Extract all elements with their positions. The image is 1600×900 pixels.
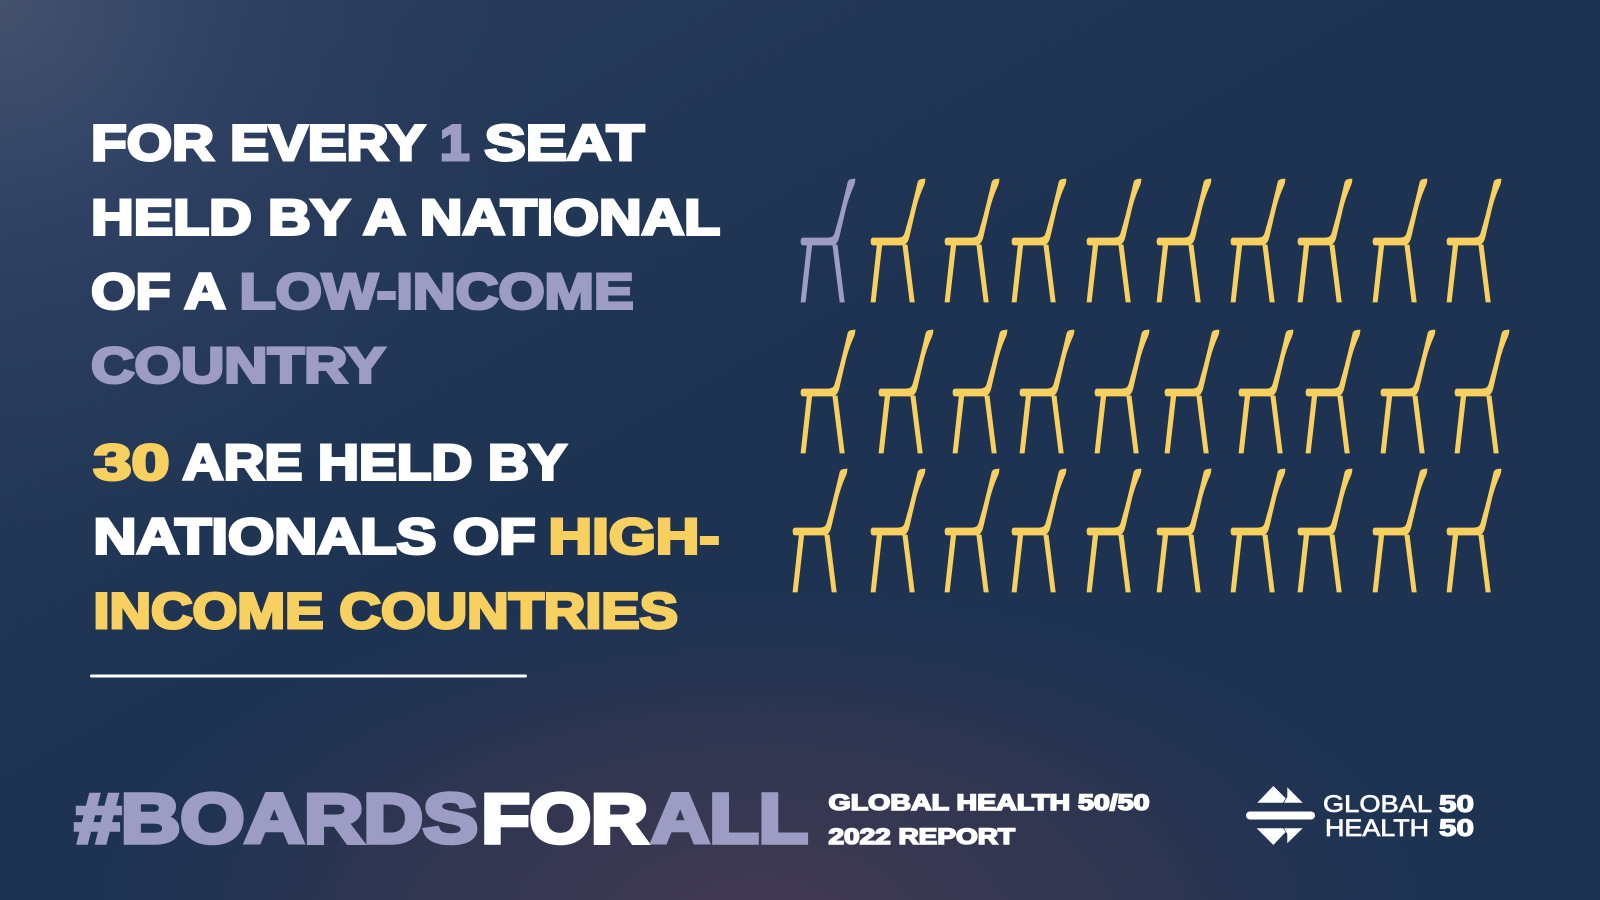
report label: GLOBAL HEALTH 50/50 (828, 790, 1150, 815)
divider line (90, 674, 527, 678)
headline: thirty seats held by high-income nationals: NATIONALS OF (94, 508, 536, 564)
headline: thirty seats held by high-income nationals: ARE HELD BY (183, 434, 567, 490)
chairs row 1: one purple, nine yellow (801, 179, 1501, 302)
headline: one seat held by low-income national: COUNTRY (91, 338, 385, 394)
logo wordmark: GLOBAL (1323, 791, 1432, 818)
headline: one seat held by low-income national: FOR EVERY (91, 115, 425, 171)
headline: thirty seats held by high-income nationals (94, 434, 720, 639)
hashtag: FOR (482, 780, 648, 858)
headline: one seat held by low-income national: OF A (91, 264, 226, 320)
headline: thirty seats held by high-income nationals: INCOME COUNTRIES (94, 583, 678, 639)
logo wordmark: HEALTH (1325, 815, 1429, 842)
hashtag: ALL (651, 780, 808, 858)
hashtag: #BOARDS (75, 780, 478, 858)
headline: one seat held by low-income national: 1 (440, 115, 470, 171)
report label: 2022 REPORT (828, 824, 1016, 849)
headline: one seat held by low-income national (91, 115, 720, 394)
headline: thirty seats held by high-income nationals: HIGH- (548, 508, 720, 564)
headline: one seat held by low-income national: LOW-INCOME (240, 264, 634, 320)
headline: one seat held by low-income national: HELD BY A NATIONAL (91, 190, 720, 246)
logo wordmark: 50 (1439, 791, 1474, 818)
logo: Global Health 50/50 (1246, 786, 1474, 845)
hashtag (75, 780, 808, 858)
headline: thirty seats held by high-income nationals: 30 (94, 434, 170, 490)
chairs row 3: ten yellow (793, 469, 1501, 592)
headline: one seat held by low-income national: SEAT (485, 115, 644, 171)
logo mark (1246, 786, 1315, 845)
report label (828, 790, 1150, 849)
logo wordmark: 50 (1439, 815, 1474, 842)
logo wordmark (1323, 791, 1474, 842)
chairs row 2: ten yellow (801, 330, 1509, 453)
